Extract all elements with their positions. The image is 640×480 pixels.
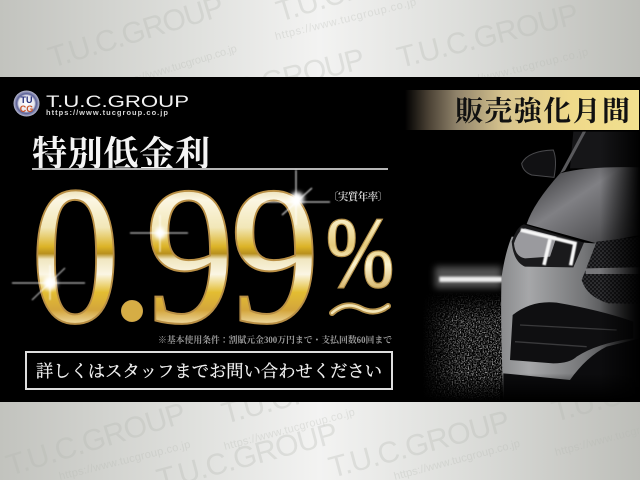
bumper body — [501, 237, 640, 400]
road — [423, 292, 507, 401]
right fade — [600, 130, 640, 400]
logo emblem: TU — [20, 95, 32, 105]
light streak — [435, 267, 503, 288]
watermarks: https://www.tucgroup.co.jp — [446, 46, 589, 93]
banner text: 販売強化月間 — [455, 96, 630, 128]
headlight — [512, 224, 584, 267]
sparkles — [12, 170, 330, 300]
lower bumper shadow — [503, 338, 640, 400]
watermarks: T.U.C.GROUP — [218, 351, 406, 431]
percent sign: % — [326, 197, 394, 308]
call to action box: 詳しくはスタッフまでお問い合わせください — [36, 362, 382, 381]
rate 0.99 — [32, 148, 319, 364]
call to action box — [26, 352, 392, 389]
logo emblem: CG — [20, 104, 33, 114]
grille — [582, 237, 640, 304]
rate 0.99: 0 — [32, 148, 120, 364]
sparkle right — [262, 170, 330, 225]
logo emblem — [14, 90, 40, 116]
rate 0.99: 9 — [231, 148, 319, 364]
hood — [527, 167, 640, 243]
watermarks: T.U.C.GROUP — [394, 0, 582, 75]
watermarks: https://www.tucgroup.co.jp — [115, 43, 238, 91]
black banner panel — [0, 77, 640, 402]
sale banner — [405, 90, 639, 130]
heading: 特別低金利 — [32, 135, 210, 174]
air intake — [510, 302, 633, 363]
logo — [14, 90, 189, 117]
rate 0.99: 9 — [146, 148, 234, 364]
logo wordmark: T.U.C.GROUP — [46, 92, 189, 111]
windshield — [570, 132, 640, 168]
footnote: ※基本使用条件：割賦元金300万円まで・支払回数60回まで — [158, 334, 392, 345]
annual rate label: 〔実質年率〕 — [328, 190, 388, 203]
tilde — [332, 305, 388, 313]
sparkle left — [12, 265, 85, 300]
sparkle centre — [130, 215, 188, 252]
watermarks: https://www.tucgroup.co.jp — [223, 406, 356, 453]
logo url: https://www.tucgroup.co.jp — [46, 108, 168, 117]
watermarks: T.U.C.GROUP — [184, 43, 368, 119]
mirror — [522, 150, 556, 177]
car illustration — [423, 130, 640, 401]
